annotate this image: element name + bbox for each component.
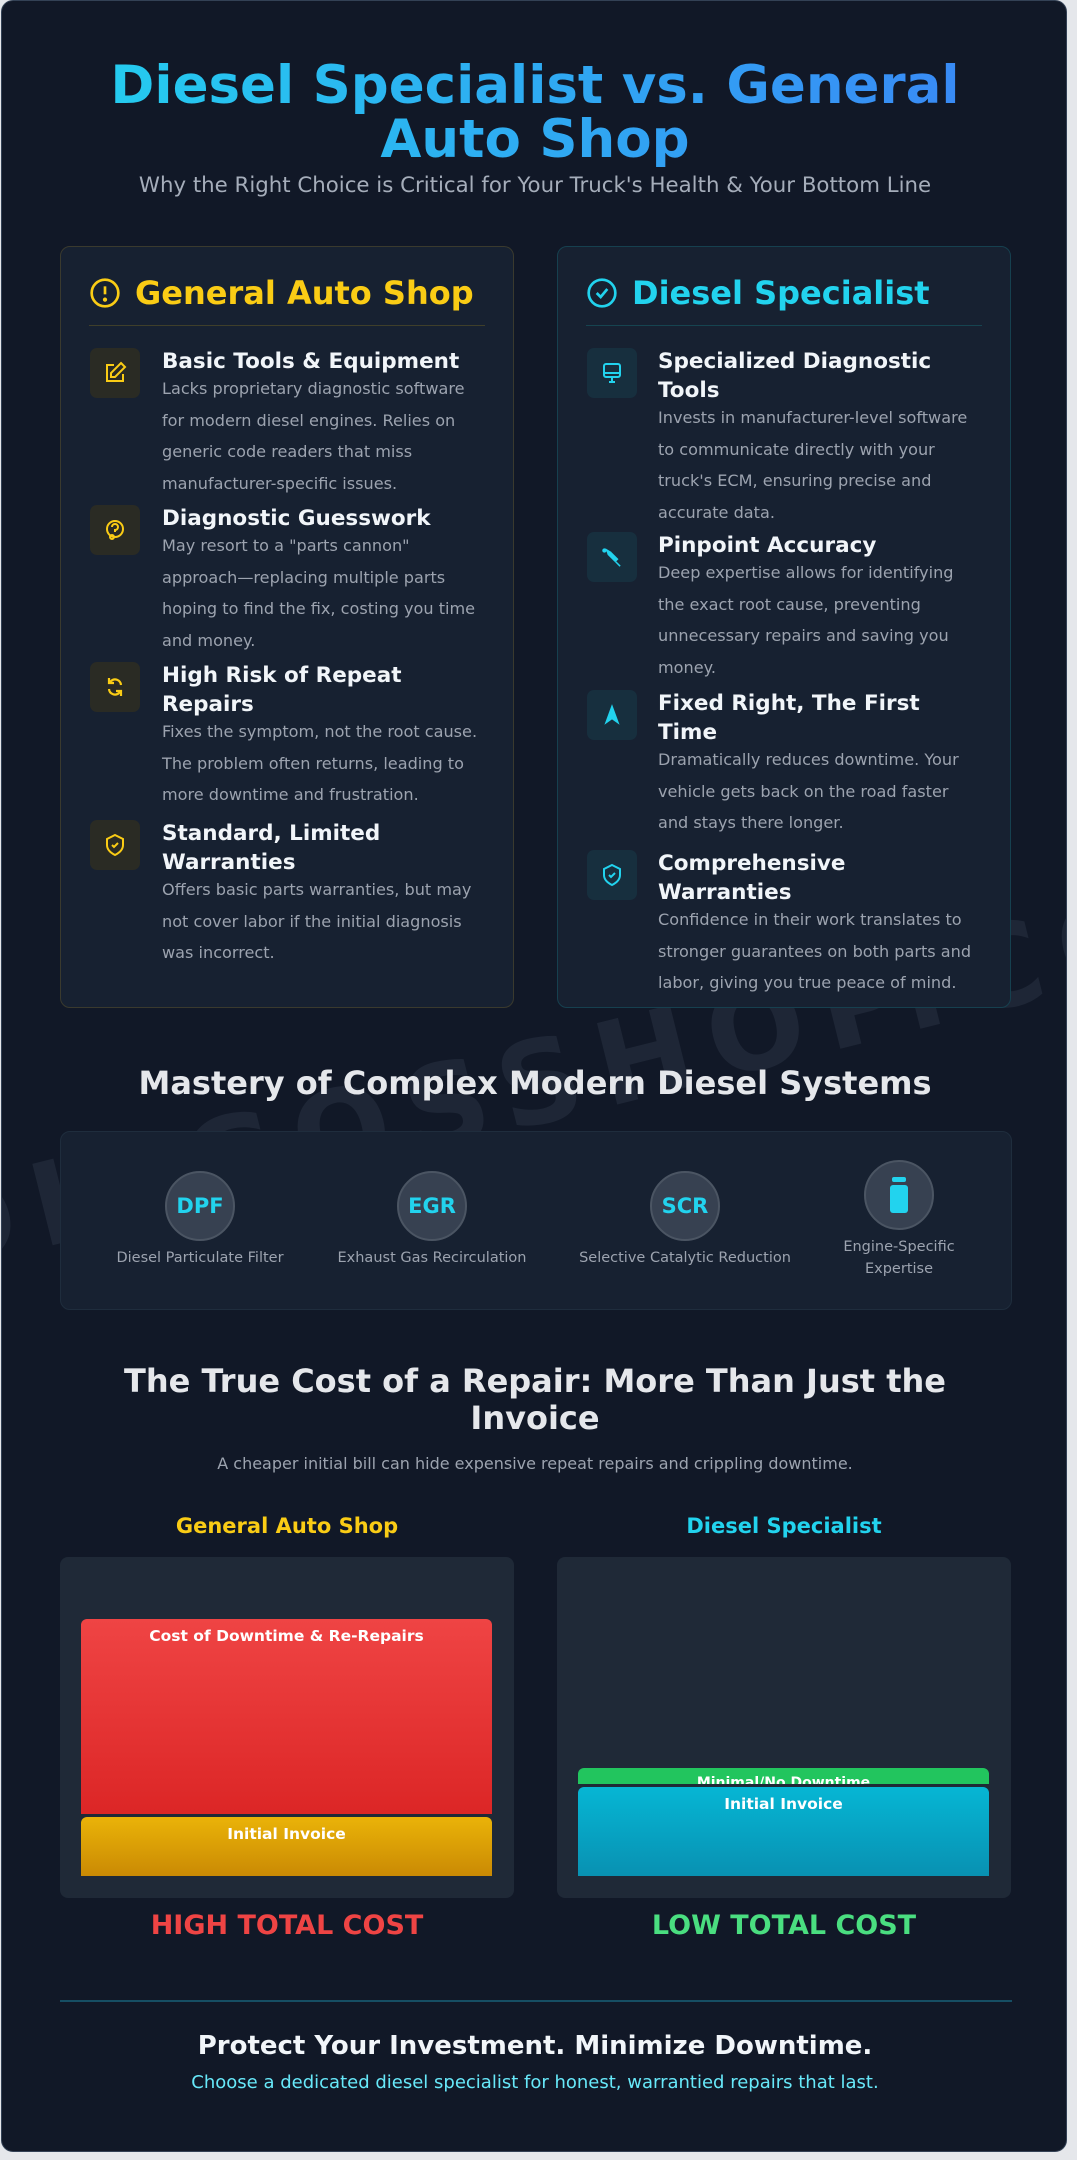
heading: general auto shop: General Auto Shop <box>135 274 474 312</box>
item: guesswork: May resort to a "parts cannon" approach—replacing multiple parts hoping to find the fix, costing you time and money. <box>162 536 475 650</box>
panel: systems <box>60 1131 1012 1310</box>
title: Auto Shop <box>380 109 690 170</box>
item: pinpoint: Deep expertise allows for identifying the exact root cause, preventing unnecessary repairs and saving you money. <box>658 563 954 676</box>
heading: true cost <box>124 1362 946 1437</box>
bar: invoice <box>578 1787 989 1876</box>
subtitle: Why the Right Choice is Critical for Your Truck's Health & Your Bottom Line <box>139 173 931 198</box>
bar: invoice <box>81 1817 492 1876</box>
icon: EGR: EGR <box>408 1194 456 1218</box>
footer heading: Protect Your Investment. Minimize Downtime. <box>198 2031 872 2061</box>
icon: arrow <box>587 690 637 740</box>
chart: diesel <box>557 1557 1011 1898</box>
icon: repeat <box>90 662 140 712</box>
label: low cost: LOW TOTAL COST <box>652 1910 916 1941</box>
icon: shield <box>587 850 637 900</box>
label: engine-specific <box>843 1239 955 1277</box>
icon: guesswork <box>90 505 140 555</box>
label: high cost: HIGH TOTAL COST <box>151 1910 423 1941</box>
item: limited warranties: Standard, Limited Warranties <box>162 821 380 875</box>
icon: monitor <box>587 348 637 398</box>
bar: downtime: Cost of Downtime & Re-Repairs <box>149 1627 424 1645</box>
bar: invoice: Initial Invoice <box>227 1825 346 1843</box>
heading: mastery: Mastery of Complex Modern Diesel Systems <box>138 1064 932 1102</box>
item: specialized tools: Specialized Diagnostic Tools <box>658 349 931 403</box>
label: DPF: Diesel Particulate Filter <box>116 1250 284 1266</box>
item: basic tools: Basic Tools & Equipment <box>162 349 459 374</box>
icon: edit <box>90 348 140 398</box>
heading: true cost: The True Cost of a Repair: More Than Just the <box>124 1362 946 1400</box>
label: general chart: General Auto Shop <box>176 1514 398 1538</box>
item: repeat repairs: Fixes the symptom, not the root cause. The problem often returns, leading to more downtime and frustration. <box>162 722 477 804</box>
title: Diesel Specialist vs. General <box>110 55 960 116</box>
item: limited warranties <box>162 821 471 962</box>
item: repeat repairs <box>162 663 477 804</box>
bar: downtime <box>81 1619 492 1814</box>
heading: true cost: Invoice <box>470 1399 600 1437</box>
icon: DPF: DPF <box>176 1194 224 1218</box>
icon: EGR <box>397 1171 467 1241</box>
label: diesel chart: Diesel Specialist <box>686 1514 882 1538</box>
item: comprehensive warranties: Comprehensive Warranties <box>658 851 846 905</box>
panel: diesel specialist <box>557 246 1011 1008</box>
icon: shield <box>90 820 140 870</box>
icon: SCR <box>650 1171 720 1241</box>
footer text: Choose a dedicated diesel specialist for honest, warrantied repairs that last. <box>191 2072 879 2093</box>
item: specialized tools: Invests in manufacturer-level software to communicate directly with your truck's ECM, ensuring precise and accurate data. <box>658 408 967 522</box>
chart: general <box>60 1557 514 1898</box>
title <box>2 59 1068 167</box>
label: engine-specific: Engine-Specific <box>843 1239 955 1255</box>
item: repeat repairs: High Risk of Repeat Repairs <box>162 663 402 717</box>
item: fixed right <box>658 691 959 832</box>
item: specialized tools <box>658 349 967 522</box>
item: comprehensive warranties <box>658 851 971 992</box>
label: SCR: Selective Catalytic Reduction <box>579 1250 791 1266</box>
item: pinpoint: Pinpoint Accuracy <box>658 533 876 558</box>
heading: diesel specialist: Diesel Specialist <box>632 274 930 312</box>
label: engine-specific: Expertise <box>865 1261 933 1277</box>
item: limited warranties: Offers basic parts warranties, but may not cover labor if the initial diagnosis was incorrect. <box>162 880 471 962</box>
panel: general auto shop <box>60 246 514 1008</box>
icon: pinpoint <box>587 532 637 582</box>
item: guesswork: Diagnostic Guesswork <box>162 506 431 531</box>
icon: SCR: SCR <box>662 1194 708 1218</box>
item: fixed right: Dramatically reduces downtime. Your vehicle gets back on the road faster and stays there longer. <box>658 750 959 832</box>
subtitle: cost: A cheaper initial bill can hide expensive repeat repairs and crippling downtime. <box>217 1454 853 1473</box>
item: basic tools: Lacks proprietary diagnostic software for modern diesel engines. Relies on generic code readers that miss manufacturer-specific issues. <box>162 379 465 492</box>
icon: DPF <box>165 1171 235 1241</box>
label: EGR: Exhaust Gas Recirculation <box>338 1250 526 1266</box>
item: comprehensive warranties: Confidence in their work translates to stronger guarantees on both parts and labor, giving you true peace of mind. <box>658 910 971 992</box>
item: fixed right: Fixed Right, The First Time <box>658 691 920 745</box>
bar: invoice: Initial Invoice <box>724 1795 843 1813</box>
bar: minimal downtime <box>578 1768 989 1784</box>
icon: engine <box>864 1160 934 1230</box>
